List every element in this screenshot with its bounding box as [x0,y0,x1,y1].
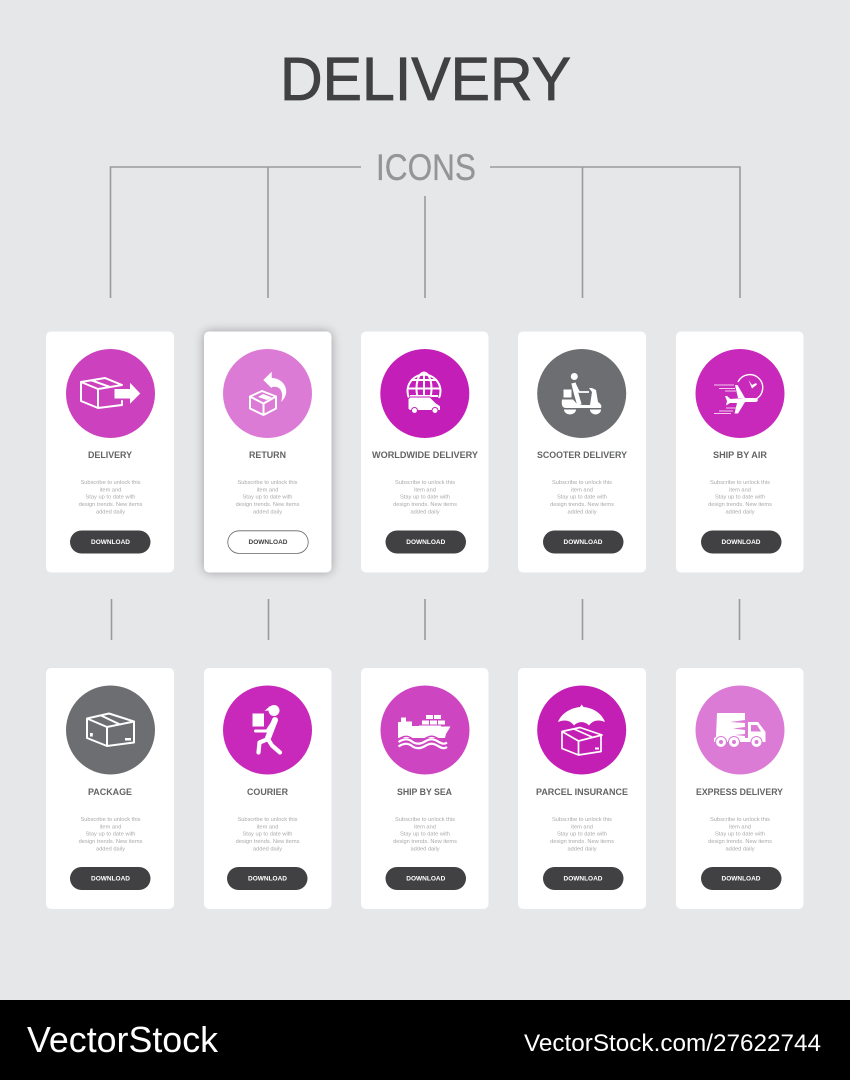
title: DELIVERY [280,45,571,113]
footer bar [0,1000,850,1080]
description [393,480,457,515]
card background [204,332,332,572]
heading: COURIER [247,787,288,798]
description: Stay up to date with [715,832,765,838]
download button: DOWNLOAD [722,876,761,882]
description: Stay up to date with [400,832,450,838]
heading: WORLDWIDE DELIVERY [372,450,479,461]
icon: box under umbrella [537,686,626,774]
description: Subscribe to unlock this [80,480,141,486]
description: Subscribe to unlock this [395,480,455,486]
panel: delivery [46,332,174,572]
card background [46,332,174,572]
description: added daily [567,846,597,852]
icon: courier carrying box [223,686,312,774]
panel: parcel insurance [518,668,646,909]
description [79,480,143,515]
download button [70,530,150,554]
description: added daily [567,509,597,515]
description: added daily [725,509,755,515]
download button [701,530,782,554]
description [708,817,772,852]
card background [518,668,646,909]
description: Stay up to date with [243,832,292,838]
icon: cargo ship [380,686,470,774]
description: item and [729,824,751,830]
download button [227,867,308,890]
description [550,480,614,515]
icon: box with return arrow [223,349,312,438]
download button [386,530,466,554]
description: added daily [725,846,755,852]
card background [518,332,646,572]
panel: scooter delivery [518,332,646,572]
download button [543,530,624,554]
description: item and [100,824,121,830]
panel: express delivery [676,668,804,909]
card background [46,668,174,909]
heading: DELIVERY [88,450,133,461]
description: item and [729,487,751,493]
download button: DOWNLOAD [91,876,130,882]
icon: fast truck [696,686,784,774]
card background [204,668,332,909]
description: design trends. New items [236,502,300,508]
footer brand: VectorStock [27,1019,219,1060]
connector lines: between rows [112,599,740,640]
description: item and [257,487,278,493]
download button: DOWNLOAD [406,876,446,882]
description: Subscribe to unlock this [237,480,298,486]
download button: DOWNLOAD [406,539,446,546]
heading: EXPRESS DELIVERY [696,787,784,798]
card background [676,332,804,572]
description: design trends. New items [236,839,300,845]
download button [701,867,782,890]
icon: package box [66,686,155,774]
description: added daily [410,509,440,515]
description: Subscribe to unlock this [710,817,770,823]
panel: package [46,668,174,909]
download button [70,867,150,890]
description: Subscribe to unlock this [552,817,612,823]
description: Stay up to date with [715,495,765,501]
description: design trends. New items [393,502,457,508]
icon: scooter courier [537,349,626,438]
description: Stay up to date with [557,495,607,501]
download button: DOWNLOAD [722,539,761,546]
description: added daily [253,846,282,852]
description: design trends. New items [708,502,772,508]
description: Subscribe to unlock this [80,817,141,823]
download button [386,867,466,890]
heading: SCOOTER DELIVERY [537,450,628,461]
description: design trends. New items [550,502,614,508]
description: item and [414,487,436,493]
card background [361,668,488,909]
heading: PACKAGE [88,787,133,798]
description: design trends. New items [550,839,614,845]
description [550,817,614,852]
panel: courier [204,668,332,909]
icon: globe with van [380,349,469,438]
icon: package with arrow [66,349,155,438]
description [236,817,300,852]
panel: worldwide delivery [361,332,488,572]
description: Subscribe to unlock this [395,817,455,823]
description: added daily [253,509,282,515]
download button: DOWNLOAD [91,539,130,546]
description: design trends. New items [708,839,772,845]
description: design trends. New items [79,839,143,845]
panel: ship by air [676,332,804,572]
description: Stay up to date with [400,495,450,501]
download button (outlined) [228,531,308,553]
download button [543,867,624,890]
description: added daily [410,846,440,852]
description: item and [571,487,593,493]
description [708,480,772,515]
description: Subscribe to unlock this [710,480,770,486]
footer url: VectorStock.com/27622744 [524,1030,821,1057]
description [393,817,457,852]
description: item and [571,824,593,830]
connector lines: top [110,167,740,298]
description [79,817,143,852]
description: Stay up to date with [243,495,292,501]
heading: SHIP BY SEA [397,787,452,798]
heading: SHIP BY AIR [713,450,767,461]
description: design trends. New items [79,502,143,508]
heading: PARCEL INSURANCE [536,787,629,798]
panel: ship by sea [361,668,488,909]
description: added daily [96,509,125,515]
description: item and [257,824,278,830]
description: design trends. New items [393,839,457,845]
heading: RETURN [249,450,286,461]
description: Stay up to date with [86,495,135,501]
description: item and [414,824,436,830]
subtitle: icons: ICONS [376,147,476,188]
download button (outlined): DOWNLOAD [248,539,288,546]
icon: plane with clock [696,349,784,438]
panel: return (highlighted) [204,332,332,572]
description: Stay up to date with [86,832,135,838]
description: Subscribe to unlock this [552,480,612,486]
card background [676,668,804,909]
description: Subscribe to unlock this [237,817,298,823]
download button: DOWNLOAD [564,539,603,546]
description [236,480,300,515]
card background [361,332,488,572]
description: added daily [96,846,125,852]
description: Stay up to date with [557,832,607,838]
download button: DOWNLOAD [248,876,287,882]
download button: DOWNLOAD [564,876,603,882]
description: item and [100,487,121,493]
